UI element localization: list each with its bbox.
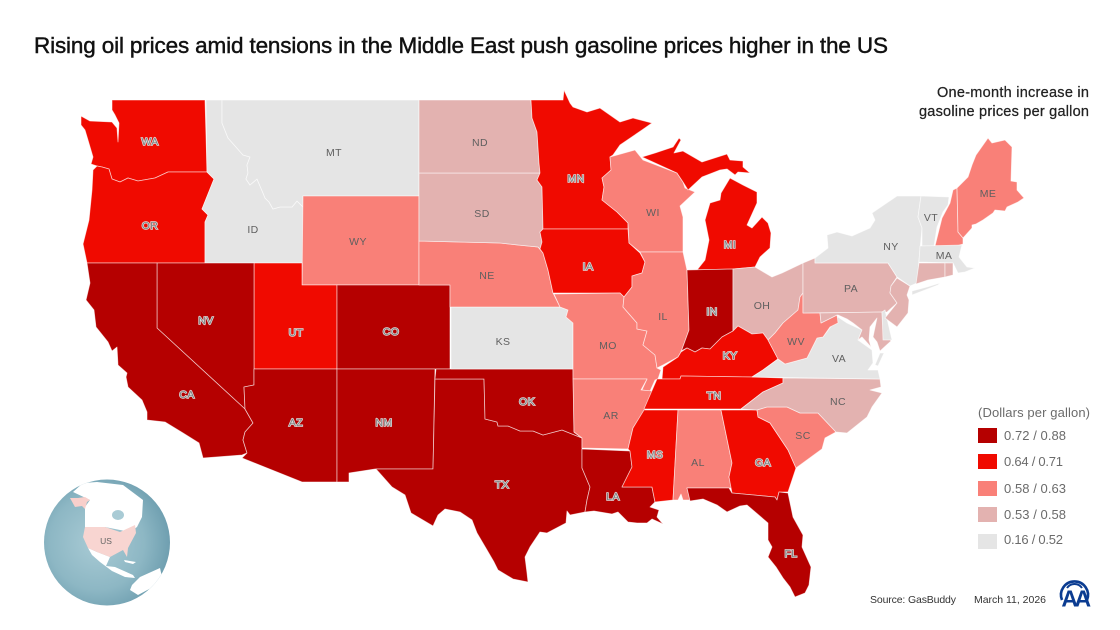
state: MS xyxy=(622,410,678,502)
state: CT xyxy=(916,263,945,284)
state: OR: OR xyxy=(142,220,158,232)
state: IL: IL xyxy=(658,311,668,323)
subtitle: one-month increase: gasoline prices per gallon xyxy=(919,104,1089,120)
globe locator xyxy=(44,480,170,606)
state: MO: MO xyxy=(599,340,617,352)
state: ME: ME xyxy=(980,188,996,200)
state: NJ xyxy=(885,278,910,327)
state: WY: WY xyxy=(349,236,367,248)
state: MN: MN xyxy=(567,173,585,185)
state: AZ: AZ xyxy=(289,417,303,429)
state: WA xyxy=(81,100,207,182)
state: SC: SC xyxy=(795,430,811,442)
state: AR xyxy=(573,379,653,449)
state: ND xyxy=(419,100,540,173)
state: KS xyxy=(451,307,573,369)
state: PA xyxy=(803,258,897,313)
subtitle: one-month increase: One-month increase in xyxy=(937,85,1089,101)
state: IA xyxy=(540,229,645,297)
legend item: 0.16 / 0.52 xyxy=(978,532,1063,549)
legend item: 0.53 / 0.58: 0.53 / 0.58 xyxy=(1004,507,1066,522)
state: NE xyxy=(419,241,560,307)
state: MT xyxy=(222,100,419,209)
state: WI: WI xyxy=(646,207,660,219)
legend title: (Dollars per gallon) xyxy=(978,405,1090,420)
state: MI: MI xyxy=(724,239,736,251)
state: VT: VT xyxy=(924,212,938,224)
state: VA: VA xyxy=(832,353,846,365)
state: WA: WA xyxy=(141,136,159,148)
state: OH xyxy=(733,263,803,340)
state: OK: OK xyxy=(519,396,535,408)
state: MD xyxy=(820,312,891,351)
state: WI xyxy=(602,150,695,252)
state: DE xyxy=(882,310,892,340)
state: ID xyxy=(202,100,303,263)
map of US states xyxy=(81,90,1024,597)
state: CO: CO xyxy=(383,326,399,338)
state: IA: IA xyxy=(583,261,593,273)
state: UT xyxy=(254,263,337,369)
state: MS: MS xyxy=(647,449,663,461)
state: AZ xyxy=(242,369,337,482)
legend item: 0.16 / 0.52: 0.16 / 0.52 xyxy=(1004,532,1063,547)
state: OH: OH xyxy=(754,300,770,312)
globe locator: US xyxy=(100,536,112,546)
state: PA: PA xyxy=(844,283,858,295)
state: WV xyxy=(768,293,838,364)
state: FL: FL xyxy=(784,548,798,560)
state: OR xyxy=(83,166,214,263)
state: NH xyxy=(935,188,963,247)
state: SD: SD xyxy=(474,208,490,220)
state: MO xyxy=(554,293,661,391)
legend item: 0.64 / 0.71: 0.64 / 0.71 xyxy=(1004,454,1063,469)
title: Rising oil prices amid tensions in the Middle East push gasoline prices higher in the US xyxy=(34,33,888,58)
state: AR: AR xyxy=(603,410,619,422)
state: TN: TN xyxy=(707,390,721,402)
state: NV: NV xyxy=(198,315,214,327)
state: MN xyxy=(531,90,652,229)
state: VT xyxy=(918,196,949,246)
state: TX xyxy=(376,379,590,582)
state: NM: NM xyxy=(375,417,393,429)
state: NE: NE xyxy=(479,270,495,282)
state: NM xyxy=(337,369,435,482)
state: AL xyxy=(673,410,732,500)
state: KY xyxy=(662,326,778,379)
date: March 11, 2026 xyxy=(974,594,1046,606)
state: NY xyxy=(815,196,940,295)
state: KY: KY xyxy=(723,350,737,362)
state: TX: TX xyxy=(495,479,509,491)
state: KS: KS xyxy=(496,336,510,348)
legend item: 0.72 / 0.88: 0.72 / 0.88 xyxy=(1004,428,1066,443)
state: ME xyxy=(957,138,1024,238)
state: OK xyxy=(435,369,582,438)
state: GA xyxy=(721,410,796,500)
state: IN xyxy=(681,269,733,352)
state: MA: MA xyxy=(936,250,952,262)
state: NY: NY xyxy=(883,241,899,253)
state: WY xyxy=(302,196,419,285)
state: VA xyxy=(752,317,884,379)
state: UT: UT xyxy=(289,327,304,339)
state: IL xyxy=(623,252,689,368)
state: LA xyxy=(582,449,663,524)
state: MI xyxy=(642,138,771,270)
state: CA: CA xyxy=(179,389,195,401)
state: WV: WV xyxy=(787,336,805,348)
state: SD xyxy=(419,173,543,249)
state: FL xyxy=(687,488,811,597)
state: GA: GA xyxy=(755,457,771,469)
state: MA xyxy=(919,245,975,273)
legend item: 0.58 / 0.63: 0.58 / 0.63 xyxy=(1004,481,1066,496)
state: SC xyxy=(757,407,836,468)
state: NC: NC xyxy=(830,396,846,408)
state: RI xyxy=(945,263,953,277)
subtitle: one-month increase xyxy=(919,85,1089,120)
source line: Source: GasBuddy xyxy=(870,594,957,606)
state: LA: LA xyxy=(606,491,620,503)
legend xyxy=(978,405,1090,549)
state: IN: IN xyxy=(706,306,718,318)
state: CA xyxy=(86,263,253,458)
state: TN xyxy=(644,376,783,409)
state: NV xyxy=(157,263,254,409)
state: CO xyxy=(337,285,450,369)
logo: AA: AA xyxy=(1061,586,1090,612)
state: MT: MT xyxy=(326,147,342,159)
state: ID: ID xyxy=(247,224,259,236)
legend item: 0.64 / 0.71 xyxy=(978,454,1063,469)
state: ND: ND xyxy=(472,137,488,149)
state: AL: AL xyxy=(691,457,705,469)
state: NC xyxy=(741,378,882,433)
